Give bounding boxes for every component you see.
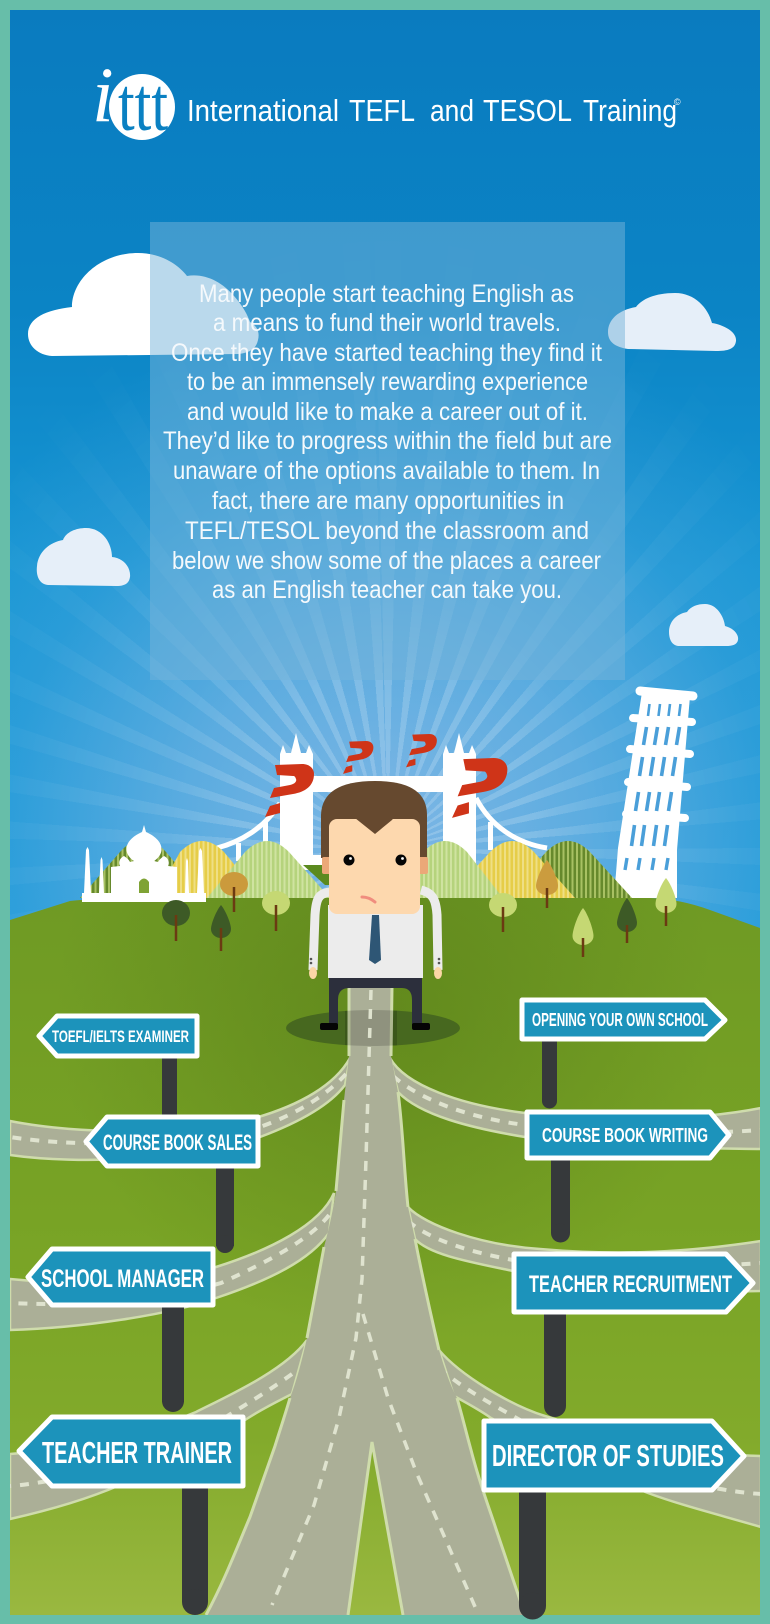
branch roads xyxy=(10,1058,761,1527)
trees xyxy=(162,860,676,957)
man character xyxy=(309,781,442,1030)
logo wordmark xyxy=(187,93,681,128)
logo mark: i xyxy=(92,51,114,138)
sign: Course Book Sales xyxy=(86,1117,258,1253)
intro text: unaware of the options available to them. In xyxy=(173,457,600,485)
cloud: upper right xyxy=(608,293,736,351)
sign: Course Book Writing xyxy=(527,1112,729,1242)
tree: orange round xyxy=(220,872,248,912)
logo xyxy=(92,51,681,147)
hill: dark left xyxy=(80,839,205,898)
landmark: Leaning Tower of Pisa xyxy=(614,691,693,898)
question mark: small left xyxy=(343,741,373,774)
intro text: a means to fund their world travels. xyxy=(213,309,561,337)
sign: Teacher Trainer xyxy=(19,1417,243,1615)
hills xyxy=(80,839,632,898)
ears xyxy=(322,857,428,874)
sky background xyxy=(10,10,760,960)
road: middle left xyxy=(10,1193,334,1330)
tree: light cone far right xyxy=(656,878,676,926)
arms xyxy=(313,892,330,970)
mouth xyxy=(362,897,375,902)
landmark: Taj Mahal xyxy=(82,825,206,902)
hill: dark right xyxy=(505,841,632,898)
sign: TOEFL/IELTS Examiner: TOEFL/IELTS EXAMINER xyxy=(52,1027,189,1046)
logo mark: ttt xyxy=(118,63,168,147)
tree: light round right xyxy=(489,893,517,932)
ground xyxy=(10,898,760,1615)
logo wordmark: and xyxy=(430,93,474,128)
main road xyxy=(206,987,525,1615)
logo wordmark: TEFL xyxy=(349,93,415,128)
translucent intro panel xyxy=(150,222,625,680)
road: upper right xyxy=(390,1058,761,1149)
intro text xyxy=(163,280,612,604)
widow's peak xyxy=(350,815,396,834)
intro text: Many people start teaching English as xyxy=(199,280,574,308)
eyes xyxy=(344,854,406,866)
tree: light cone xyxy=(572,908,594,957)
logo wordmark: International xyxy=(187,93,339,128)
tree: dark cone xyxy=(211,905,231,951)
question marks xyxy=(265,734,507,818)
sign: TOEFL/IELTS Examiner xyxy=(39,1016,197,1118)
cloud: big upper left xyxy=(28,253,259,356)
sign: Opening Your Own School xyxy=(522,1000,725,1108)
hair xyxy=(321,781,427,858)
trousers xyxy=(329,978,422,1025)
tree: dark cone right xyxy=(617,898,637,943)
cloud: small lower right xyxy=(669,604,738,646)
sign: School Manager xyxy=(28,1249,213,1412)
road: middle right xyxy=(408,1207,761,1292)
hill: green left xyxy=(207,841,330,898)
intro text: fact, there are many opportunities in xyxy=(212,487,564,515)
cloud: small lower left xyxy=(37,528,130,586)
sign: Teacher Recruitment xyxy=(514,1254,753,1417)
intro text: Once they have started teaching they find it xyxy=(171,339,602,367)
tree: dark round xyxy=(162,900,190,941)
question mark: small right xyxy=(406,734,437,767)
question mark: big left xyxy=(265,764,314,817)
road: lower left xyxy=(10,1340,307,1519)
intro text: as an English teacher can take you. xyxy=(212,576,562,604)
branch road dashes xyxy=(10,1074,761,1494)
tree: light round xyxy=(262,891,290,931)
shoes xyxy=(320,1023,430,1030)
intro text: below we show some of the places a career xyxy=(172,547,601,575)
logo wordmark: © xyxy=(674,97,681,107)
hill: green right xyxy=(385,841,503,898)
man's ground shadow xyxy=(286,1010,460,1046)
tree: orange cone xyxy=(536,860,558,908)
logo wordmark: Training xyxy=(583,93,677,128)
question mark: big right xyxy=(452,758,507,818)
logo wordmark: TESOL xyxy=(483,93,572,128)
sign: Director of Studies xyxy=(484,1421,744,1620)
face xyxy=(329,819,420,914)
road: lower right xyxy=(439,1350,761,1527)
sign: Teacher Trainer: TEACHER TRAINER xyxy=(42,1435,232,1470)
cuff buttons xyxy=(310,958,440,964)
intro text: TEFL/TESOL beyond the classroom and xyxy=(185,517,589,545)
sign: School Manager: SCHOOL MANAGER xyxy=(41,1265,204,1293)
hill: yellow left xyxy=(155,841,262,898)
sign: Course Book Sales: COURSE BOOK SALES xyxy=(103,1130,252,1155)
intro text: and would like to make a career out of it. xyxy=(187,398,588,426)
intro text: They’d like to progress within the field but are xyxy=(163,427,612,455)
logo mark xyxy=(92,51,175,147)
hands xyxy=(309,967,317,979)
tie xyxy=(369,915,381,964)
hill: yellow right xyxy=(448,841,575,898)
intro text: to be an immensely rewarding experience xyxy=(187,368,588,396)
shirt xyxy=(328,905,423,978)
road: upper left xyxy=(10,1058,350,1160)
landmark: Tower Bridge xyxy=(217,733,547,870)
sun rays xyxy=(48,536,728,905)
